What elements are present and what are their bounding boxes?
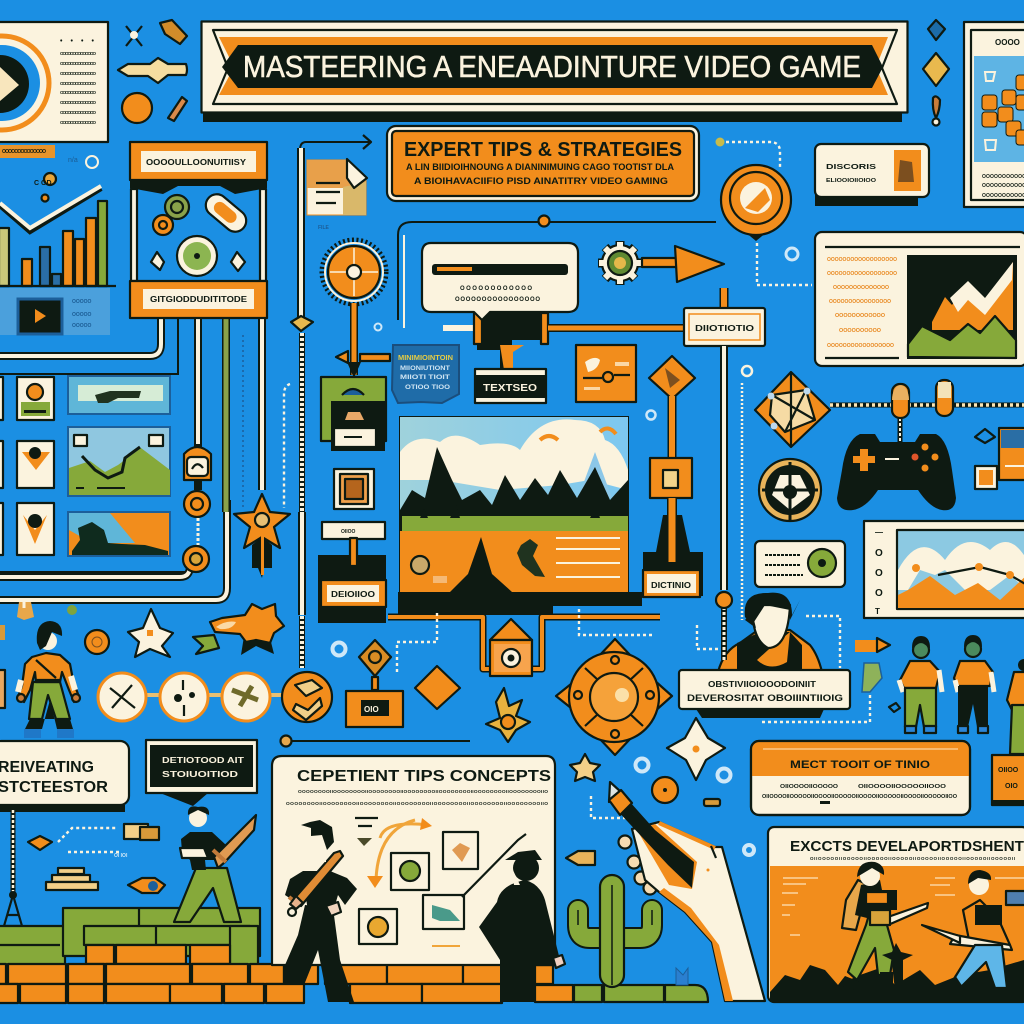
callout: speech bubble: OOOOOOOOOOOOOOOO [455,297,540,303]
icon: orange gear compass [322,240,390,378]
card: developer label: OBSTIVIIOIOOODOINIIT [708,680,816,689]
panel: right route chart: O [875,548,883,559]
panel: right route chart: — [875,528,883,537]
title banner: MASTEERING A ENEAADINTURE VIDEO GAME [243,49,861,84]
icon: video thumbnail play: OOOOO [72,299,92,305]
panel: competent tips [272,756,555,965]
panel: right mountain chart [815,232,1024,366]
panel: top-right hex map [964,22,1024,207]
character 3 [1007,659,1024,754]
panel: competent tips: OOOOOOOOIIOOOOOOOOIIOOOOOOOOIIOOOOOOOOIIOOOOOOOOIIOOOOOOOOIIOOOOOOOOIIO [298,789,548,795]
panel: right mountain chart: OOOOOOOOOOOOOOOOOO [827,257,898,263]
icons: blue rings [332,642,754,855]
title banner [202,22,908,122]
icon: white star [128,609,173,657]
card: signpost left: DEIOIIOO [331,590,375,599]
panel: gameplay column [130,142,267,318]
icons: arrow tag and shorts [855,638,900,712]
panel: right mountain chart: OOOOOOOOOO [839,328,882,334]
panel: right mountain chart: OOOOOOOOOOOOOO [833,285,890,291]
callout: dark speech [146,740,257,806]
character: developer bust [718,593,822,672]
panel: top-left video card: • • • • [60,38,95,45]
dotted line: right [374,248,1024,620]
panel: dev note: OIIOOOOIIOOOOOIIOOO [858,784,946,790]
icon: wheel [759,459,821,521]
icon: pins [892,380,953,444]
icon: video thumbnail play: OOOOO [72,312,92,318]
callout: dark speech: DETIOTOOD AIT [162,756,244,765]
panel: experts development: EXCCTS DEVELAPORTDSHENT [790,839,1024,855]
panel: right mountain chart: OOOOOOOOOOOOOOOOOO [827,271,898,277]
thumbnail: helicopter [68,376,170,414]
panel: top-left video card: OOOOOOOOOOOOOO [60,120,96,125]
ground: green blocks [0,908,260,966]
label strip [0,145,55,158]
orb: polygon [755,372,830,447]
icon: document [307,159,367,231]
bar chart: left: n/a [68,157,78,164]
tag: black label [475,369,546,403]
tag: orange post label [684,288,765,590]
tag: orange post label: DIIOTIOTIO [695,324,754,333]
dotted connectors: developer [579,592,870,818]
icon: arrow label [566,851,595,865]
card: discover [815,144,929,206]
illustration: hand with pencil [609,782,765,1001]
divider: dot line [280,736,470,746]
icon: coin 2 [85,630,109,654]
panel: dev note: MECT TOOIT OF TINIO [790,759,931,771]
card: orange mini chart [576,345,636,402]
panel: top-left video card: OOOOOOOOOOOOOO [60,71,96,76]
panel: competent tips: CEPETIENT TIPS CONCEPTS [297,768,551,785]
icons: tower and mini treasures: OI IOI [114,853,128,859]
arrow: curved [367,818,432,888]
card: green character tile [321,377,386,451]
thumbnails column [0,377,54,555]
card: developer label: DEVEROSITAT OBOIIINTIIOIG [687,693,843,703]
card: signpost left [318,522,386,623]
pipes: left frame [0,318,262,600]
panel: top-left video card: OOOOOOOOOOOOOO [60,90,96,95]
icon: sunburst [486,688,530,742]
callout: dark speech: STOIUOITIOD [162,770,238,779]
heading: expert tips: EXPERT TIPS & STRATEGIES [404,139,682,161]
connector: orange pipes [388,617,660,669]
icon: orange coin [153,215,173,235]
icon: tile set [355,818,478,946]
icons: tower and mini treasures [4,810,165,926]
icons: circle row [98,672,332,722]
tag: right orange note [992,755,1024,806]
card: discover: ELIOOIOIIOIOO [826,178,876,184]
panel: dev note: OIIOOOOIIOOOOO [780,784,838,790]
panel: competent tips: OOOOOOOOIIOOOOOOOOIIOOOOOOOOIIOOOOOOOOIIOOOOOOOOIIOOOOOOOOIIOOOOOOOOIIO [286,801,548,807]
tag: right orange note: OIIOO [998,767,1019,774]
panel: gameplay column: OOOOULLOONUITIISY [146,158,247,167]
panel: top-right hex map: OOOO [995,38,1020,47]
character: top-left hero [17,621,80,738]
cards: right edge [975,428,1024,489]
panel: experts development [768,827,1024,1002]
panel: top-left video card: OOOOOOOOOOOOOO [60,61,96,66]
badge: blue note: MIIOTI TIOIT [400,375,450,381]
panel: right route chart [864,521,1024,618]
panel: dev note: OIIOOOOIIOOOOOIIOOOOIIOOOOOIIOOOOIIOOOOOIIOOOOIIOOOOOIIOO [762,794,957,800]
panel: top-left video card [0,22,108,142]
ground: orange bricks [0,945,573,1003]
ground: green strip [574,985,708,1002]
thumbnail: green hills [68,427,170,496]
callout: elevating character: REIVEATING [0,759,94,776]
panel: top-left video card: OOOOOOOOOOOOOO [60,51,96,56]
icon: diamond post [643,356,703,597]
badge: blue note: MIIONIUTIONT [400,366,450,372]
character: man back view [479,850,565,1002]
callout: elevating character [0,741,129,812]
icon: pin and coin chain [183,444,211,572]
label strip: OOOOOOOOOOOOOO [2,149,46,155]
tag: right orange note: OIO [1005,783,1018,790]
icon: small orange puzzle card [334,469,374,509]
card: developer label [679,670,850,718]
icon: video thumbnail play [18,299,92,334]
heading: expert tips: A BIOIHAVACIIFIO PISD AINATITRY VIDEO GAMING [414,176,668,186]
icon: hanging star [234,494,290,578]
heading: expert tips: A LIN BIIDIOIHNOUNG A DIANINIMUING CAGO TOOTIST DLA [406,162,675,172]
icon: ribbon emblem [193,604,284,655]
icon: four point star [667,718,725,780]
bar chart: left [0,156,116,335]
icon: cream gear with arrow [598,241,724,285]
icon: gem post: OIO [364,705,379,714]
icon: orange diamond [415,666,460,709]
icon: center silhouette [882,943,913,990]
badge: blue note: MINIMIOINTOIN [398,355,453,362]
connector with dot [398,216,716,328]
icon: document: FILE [318,225,329,231]
panel: top-left video card: OOOOOOOOOOOOOO [60,100,96,105]
icon: green gear [177,236,217,276]
icon: house camera [490,619,532,676]
thumbnail: sunset [68,512,170,556]
panel: right route chart: O [875,568,883,579]
card: signpost left: OIIOO [341,529,356,535]
icon: small pill [704,799,720,806]
panel: dev note [751,741,970,815]
panel: gameplay column: GITGIODDUDITITODE [150,295,248,304]
character 2 [954,635,994,733]
icon: game controller [837,434,956,510]
icons: diamonds and balloon [923,20,949,126]
icon: bits far-left [0,625,5,708]
landscape scene [398,416,642,615]
tag: black label: TEXTSEO [483,383,537,394]
icon: coin [652,777,678,803]
panel: right mountain chart: OOOOOOOOOOOOOOOO [829,299,892,305]
callout: speech bubble: OOOOOOOOOOOO [460,286,532,292]
characters: trio right [899,635,1024,754]
panel: right route chart: T [875,607,880,616]
panel: top-left video card: OOOOOOOOOOOOOO [60,81,96,86]
icon: cactus [578,875,688,987]
badge: blue note [392,345,459,403]
icon: pendant [17,600,77,620]
character: hero lunging [922,870,1024,990]
icon: small star [570,754,600,781]
callout: elevating character: STCTEESTOR [0,779,108,796]
icon: white diamonds [151,252,245,271]
callout: speech bubble [422,243,684,370]
icon: round badge [716,138,812,285]
icon: video thumbnail play: OOOOO [72,323,92,329]
panel: top-left video card: OOOOOOOOOOOOOO [60,110,96,115]
character 1 [899,636,942,733]
heading: expert tips [387,126,699,201]
icon: green coin [165,195,189,219]
icon: diamond post: DICTINIO [651,581,691,590]
character: man with sword front [285,820,357,1002]
icons: top small tools [118,20,187,123]
pipe: central vertical [284,135,371,668]
icon: capsule [201,190,251,236]
card: discover: DISCORIS [826,162,876,171]
card: green coin note [755,541,845,587]
panel: right route chart: O [875,588,883,599]
panel: right mountain chart: OOOOOOOOOOOO [835,313,886,319]
icon: compass star [556,639,672,755]
panel: right mountain chart: OOOOOOOOOOOOOOOOO [827,343,895,349]
panel: experts development: OIIOOOOOIIOOOOOIIOOOOOIIOOOOOIIOOOOOIIOOOOOIIOOOOOIIOOOOOII [810,856,1015,861]
icon: gem post [346,612,437,727]
character: hero with backpack [838,862,928,990]
bar chart: left: C OD [34,180,52,187]
badge: blue note: OTIOO TIOO [405,385,450,391]
character: hero with sword [174,806,256,922]
